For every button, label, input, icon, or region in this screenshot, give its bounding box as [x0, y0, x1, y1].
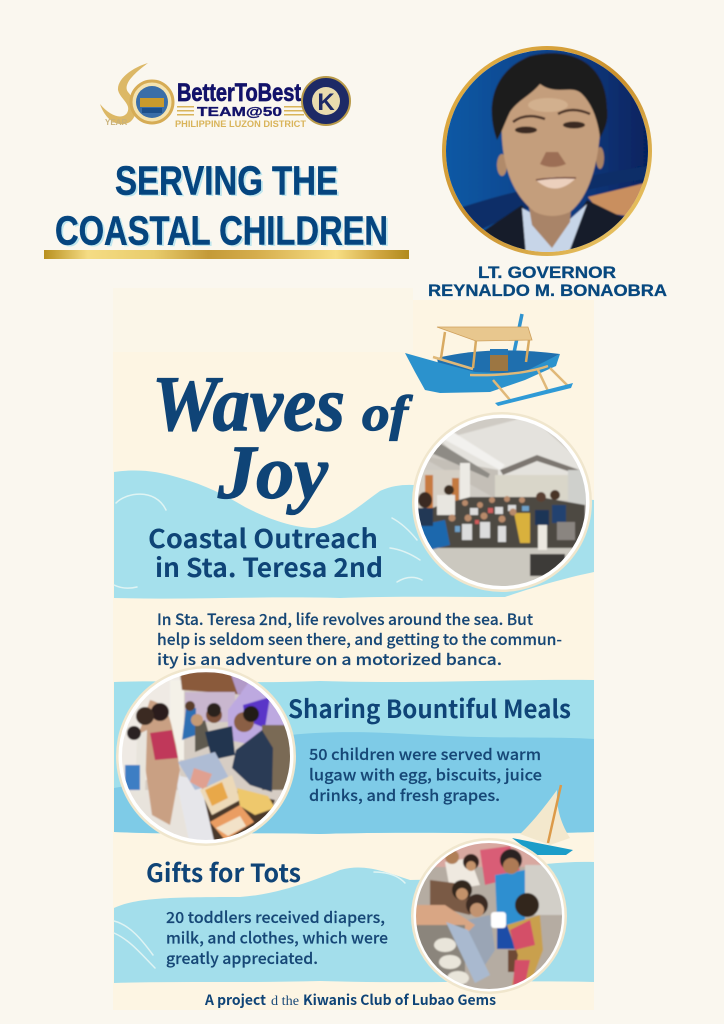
title text: SERVING THE — [115, 158, 338, 204]
icon: Kiwanis seal: K — [317, 89, 335, 116]
title text — [55, 158, 388, 254]
title shadow: SERVING THE — [117, 159, 340, 205]
wave: top band — [114, 470, 594, 599]
title — [55, 158, 390, 255]
wave: bottom band — [114, 862, 594, 983]
heading: Gifts for Tots — [146, 854, 301, 890]
logo team text — [194, 104, 284, 119]
icon: Kiwanis seal — [302, 77, 350, 125]
gold underline bar — [44, 250, 409, 259]
portrait caption: REYNALDO M. BONAOBRA — [428, 281, 667, 300]
title shadow — [57, 159, 390, 255]
photo: crowd in hall — [412, 412, 592, 592]
icon: 50th anniversary emblem — [100, 63, 173, 127]
logo stripes — [177, 106, 304, 116]
heading: Sharing Bountiful Meals — [288, 690, 571, 726]
footer credit — [204, 990, 496, 1010]
text block: intro: ity is an adventure on a motorized banca. — [157, 648, 502, 670]
text block: intro: In Sta. Teresa 2nd, life revolves around the sea. But — [157, 608, 533, 630]
body text — [309, 743, 542, 806]
logo wordmark: Better To Best: BetterToBest — [177, 79, 302, 107]
footer credit: Kiwanis Club of Lubao Gems — [303, 990, 496, 1010]
footer credit: d the — [271, 994, 299, 1009]
portrait caption — [428, 263, 667, 300]
photo: serving meals — [116, 666, 296, 846]
section: gifts for tots — [146, 854, 388, 969]
decorative wave strokes — [114, 494, 422, 968]
logo team text: TEAM@50 — [197, 105, 282, 119]
section: sharing bountiful meals — [288, 690, 571, 806]
subheading: Coastal Outreach: in Sta. Teresa 2nd — [155, 548, 383, 585]
body text: drinks, and fresh grapes. — [309, 784, 500, 806]
logo district text: PHILIPPINE LUZON DISTRICT — [175, 119, 306, 130]
heading: Waves of Joy: Joy — [217, 431, 328, 515]
body text: greatly appreciated. — [166, 947, 318, 969]
logo group — [100, 63, 350, 130]
body text — [166, 906, 388, 969]
title text: COASTAL CHILDREN — [55, 208, 388, 254]
heading: Waves of Joy: of — [362, 385, 413, 441]
subheading: Coastal Outreach — [148, 519, 383, 585]
body text: lugaw with egg, biscuits, juice — [309, 764, 542, 786]
icon: outrigger boat — [405, 314, 573, 406]
poster background — [113, 290, 594, 1010]
body text: milk, and clothes, which were — [166, 926, 388, 948]
text block: intro — [157, 608, 562, 670]
photo: toddlers and gifts — [411, 838, 567, 995]
icon: 50th anniversary emblem: YEAR — [105, 118, 127, 127]
panel: waves of joy poster — [113, 288, 594, 1010]
wave: middle band — [114, 680, 594, 834]
heading: Waves of Joy: Waves — [152, 360, 345, 447]
footer credit: A project — [204, 990, 266, 1010]
body text: 50 children were served warm — [309, 743, 541, 765]
portrait photo — [440, 45, 655, 262]
portrait caption: LT. GOVERNOR — [478, 263, 616, 282]
body text: 20 toddlers received diapers, — [166, 906, 385, 928]
subheading: Coastal Outreach: Coastal Outreach — [148, 519, 378, 556]
heading: Waves of Joy — [152, 360, 413, 515]
title shadow: COASTAL CHILDREN — [57, 209, 390, 255]
icon: sailboat — [512, 785, 573, 855]
wave: middle band darker — [114, 732, 594, 834]
text block: intro: help is seldom seen there, and getting to the commun- — [157, 628, 562, 650]
